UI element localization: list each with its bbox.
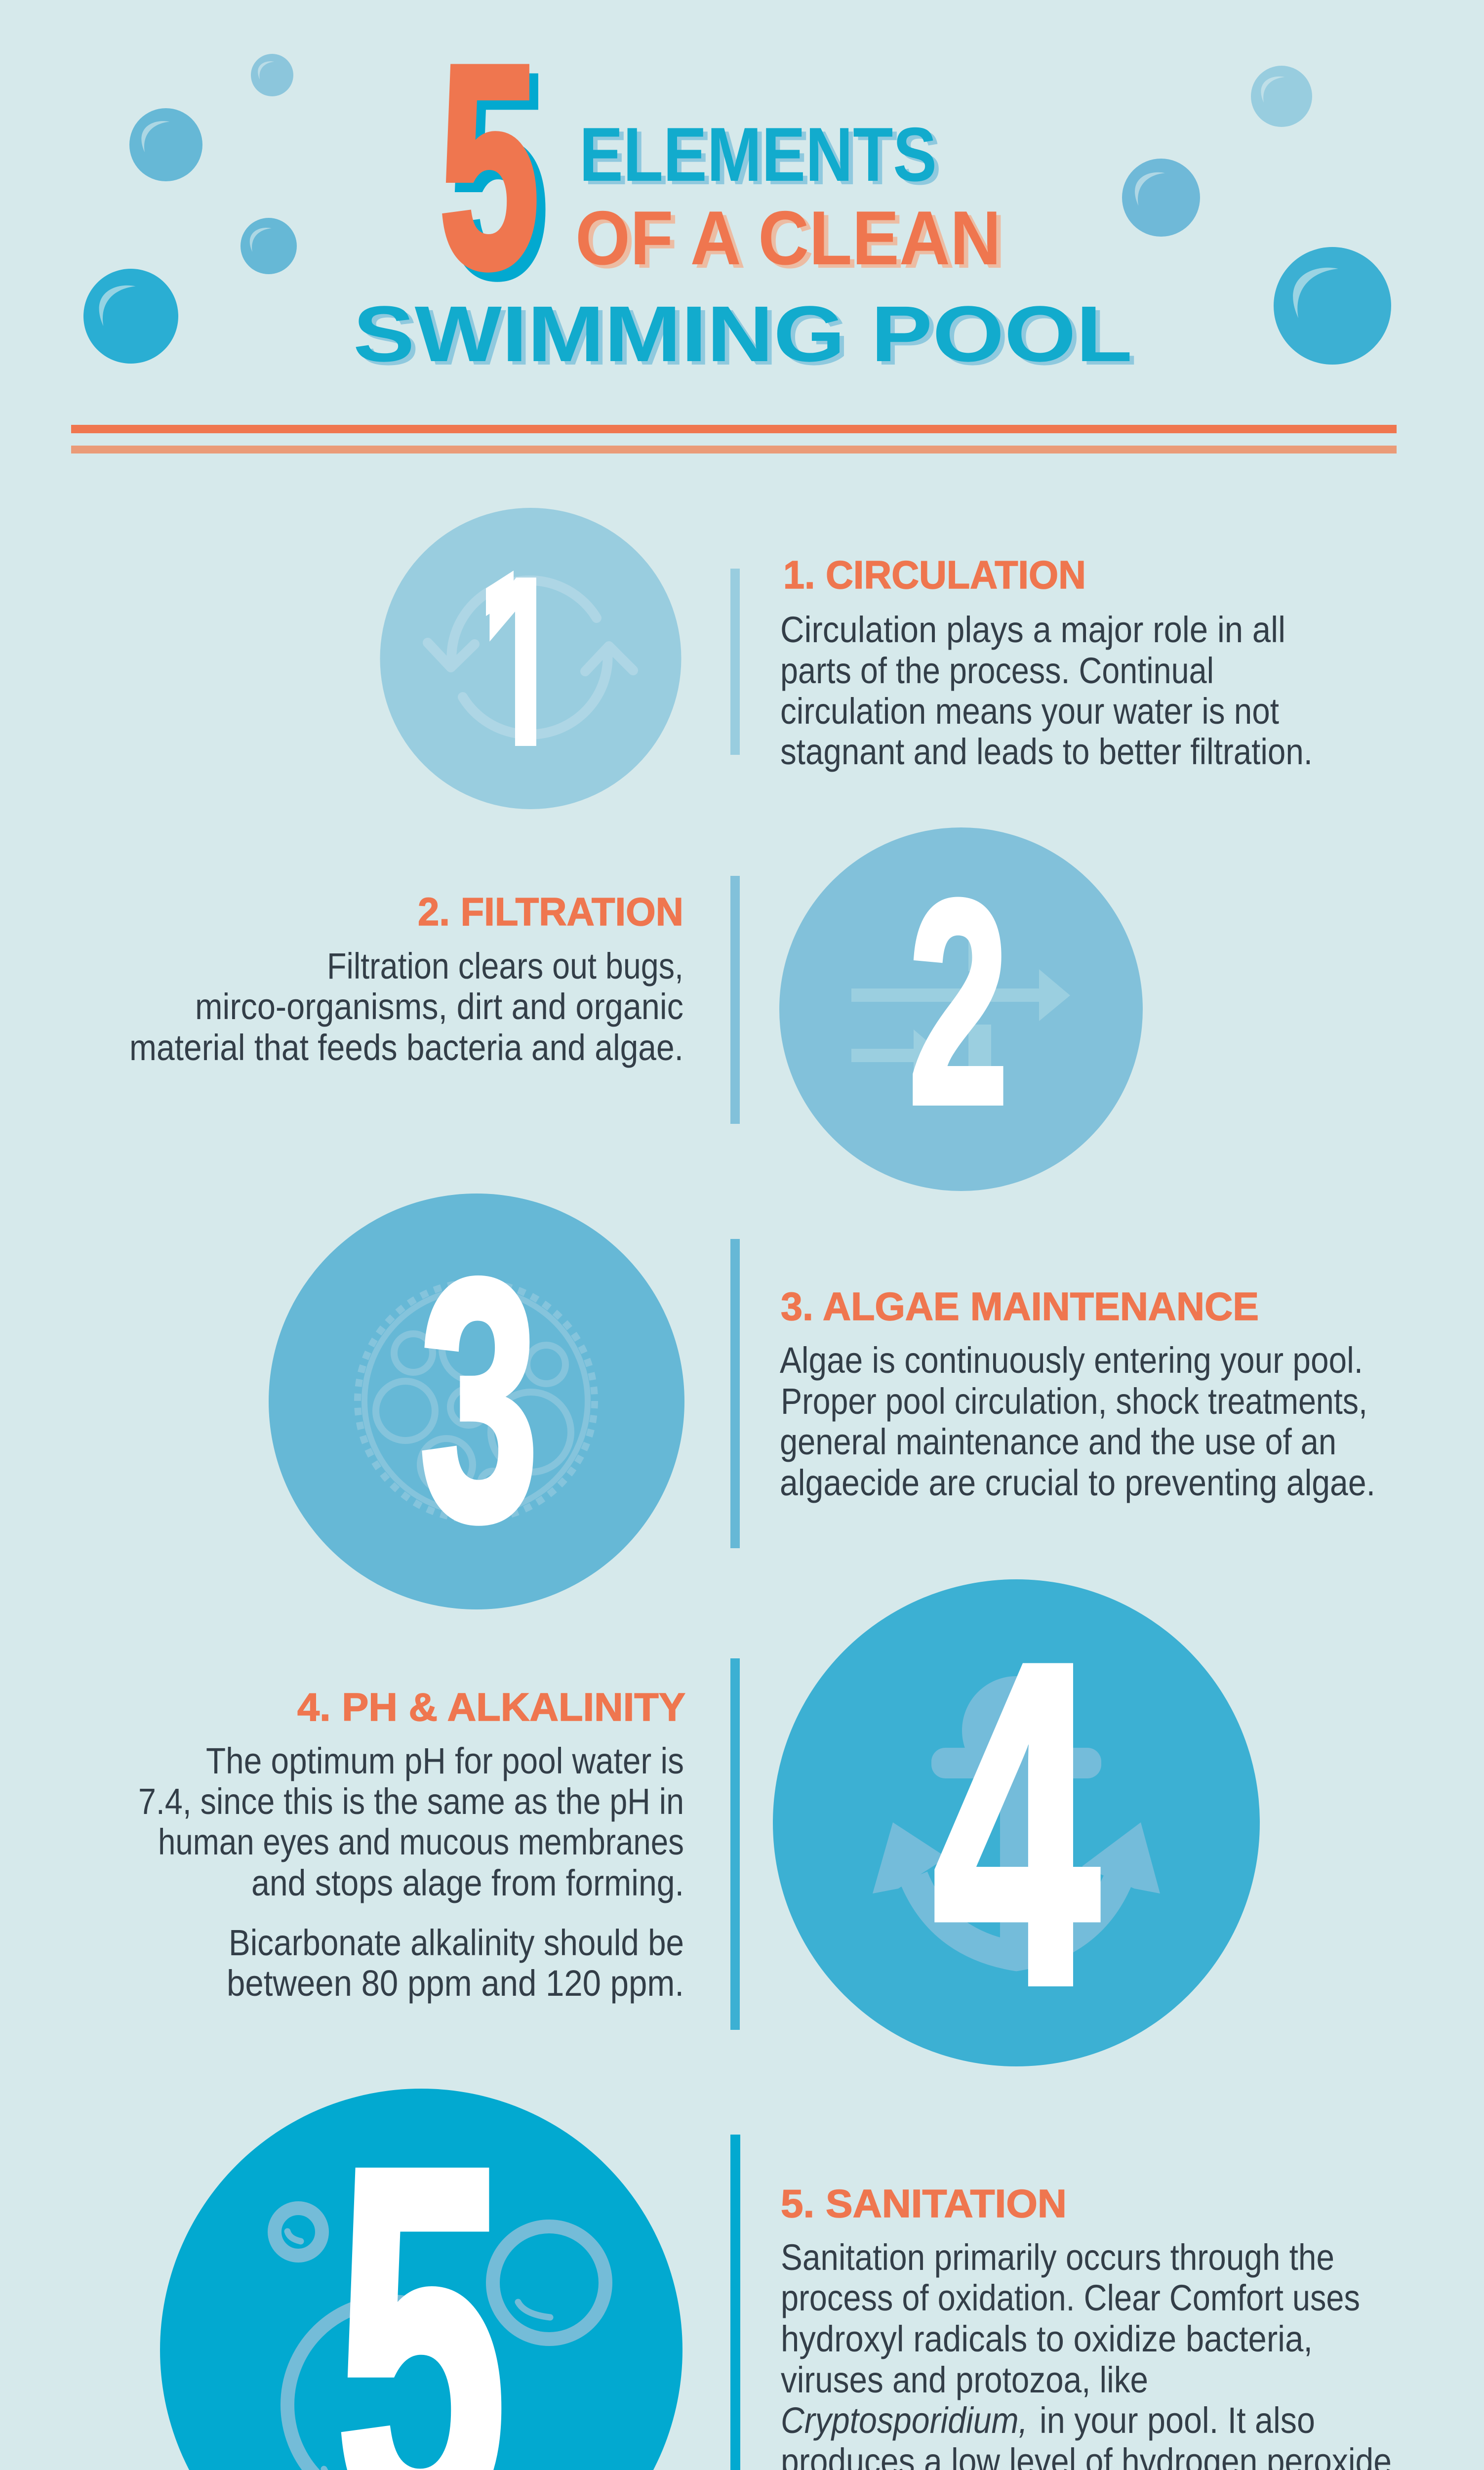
title numeral 5: 5 xyxy=(439,5,539,328)
body text xyxy=(780,609,1313,772)
bubble xyxy=(129,108,202,181)
vertical rule xyxy=(730,569,740,755)
body text: mirco-organisms, dirt and organic xyxy=(195,986,683,1027)
icon: algae gear xyxy=(358,1282,595,1520)
bubble xyxy=(251,54,293,96)
body text: and stops alage from forming. xyxy=(251,1862,684,1903)
heading: 3. ALGAE MAINTENANCE xyxy=(781,1284,1259,1328)
body text: viruses and protozoa, like xyxy=(781,2359,1148,2400)
bubble xyxy=(241,218,297,274)
body text: in your pool. It also xyxy=(1040,2400,1315,2441)
bubble xyxy=(83,269,178,364)
numeral 4: 4 xyxy=(933,1568,1101,2079)
circle badge 4 xyxy=(773,1579,1260,2066)
heading: 2. FILTRATION xyxy=(418,890,683,934)
body text: Algae is continuously entering your pool. xyxy=(780,1340,1363,1381)
body text: general maintenance and the use of an xyxy=(780,1421,1336,1462)
bubble xyxy=(1274,247,1391,365)
numeral 1: 1 xyxy=(479,515,565,840)
icon: circular arrows xyxy=(428,580,633,735)
body text: 7.4, since this is the same as the pH in xyxy=(138,1781,684,1822)
panel: filtration xyxy=(129,827,1143,1191)
body text xyxy=(138,1740,684,2004)
vertical rule xyxy=(730,2135,740,2470)
icon: anchor xyxy=(873,1693,1160,1970)
circle badge 1 xyxy=(380,508,682,809)
body text: material that feeds bacteria and algae. xyxy=(129,1027,683,1068)
panel: circulation xyxy=(380,508,1313,840)
vertical rule xyxy=(730,1658,740,2030)
title line: swimming pool: SWIMMING POOL xyxy=(358,293,1137,381)
body text: between 80 ppm and 120 ppm. xyxy=(227,1963,684,2004)
icon: filter arrows xyxy=(851,931,1070,1080)
numeral 3: 3 xyxy=(420,1209,539,1591)
body text: Proper pool circulation, shock treatments, xyxy=(781,1381,1367,1422)
title line: swimming pool: SWIMMING POOL xyxy=(353,289,1132,378)
heading: 4. PH & ALKALINITY xyxy=(297,1685,685,1729)
body text: stagnant and leads to better filtration. xyxy=(780,731,1313,772)
body text: human eyes and mucous membranes xyxy=(158,1821,684,1862)
body text: circulation means your water is not xyxy=(780,691,1279,732)
body text: Circulation plays a major role in all xyxy=(780,609,1285,650)
panel: algae maintenance xyxy=(269,1194,1375,1609)
body text: Sanitation primarily occurs through the xyxy=(781,2237,1334,2278)
numeral 1 xyxy=(486,571,536,746)
title line: of a clean: OF A CLEAN xyxy=(580,199,1005,284)
title line: elements: ELEMENTS xyxy=(579,112,937,197)
body text: Filtration clears out bugs, xyxy=(327,946,683,987)
bubble xyxy=(1251,66,1312,127)
title line: elements: ELEMENTS xyxy=(584,115,941,201)
circle badge 5 xyxy=(160,2089,682,2470)
body text: hydroxyl radicals to oxidize bacteria, xyxy=(781,2318,1313,2359)
bubble xyxy=(1122,159,1200,237)
title numeral 5: 5 xyxy=(448,14,548,337)
heading: 5. SANITATION xyxy=(781,2182,1067,2225)
header title xyxy=(353,5,1137,381)
body text: Cryptosporidium, xyxy=(781,2400,1028,2441)
body text: Bicarbonate alkalinity should be xyxy=(229,1922,684,1963)
circle badge 3 xyxy=(269,1194,684,1609)
body text xyxy=(780,1340,1375,1503)
circle badge 2 xyxy=(779,827,1143,1191)
icon: bubbles xyxy=(275,2208,605,2470)
vertical rule xyxy=(730,1239,740,1548)
panel: sanitation xyxy=(160,2062,1392,2470)
body text xyxy=(129,946,683,1068)
body text xyxy=(781,2237,1392,2470)
title line: of a clean: OF A CLEAN xyxy=(575,195,1001,281)
top divider bars xyxy=(71,425,1397,453)
vertical rule xyxy=(730,876,740,1124)
body text: algaecide are crucial to preventing algae. xyxy=(780,1462,1375,1503)
body text: process of oxidation. Clear Comfort uses xyxy=(781,2277,1360,2318)
body text: The optimum pH for pool water is xyxy=(206,1740,684,1781)
numeral 2: 2 xyxy=(909,841,1008,1164)
body text: parts of the process. Continual xyxy=(780,650,1214,691)
panel: pH and alkalinity xyxy=(138,1568,1260,2079)
heading: 1. CIRCULATION xyxy=(783,553,1086,597)
